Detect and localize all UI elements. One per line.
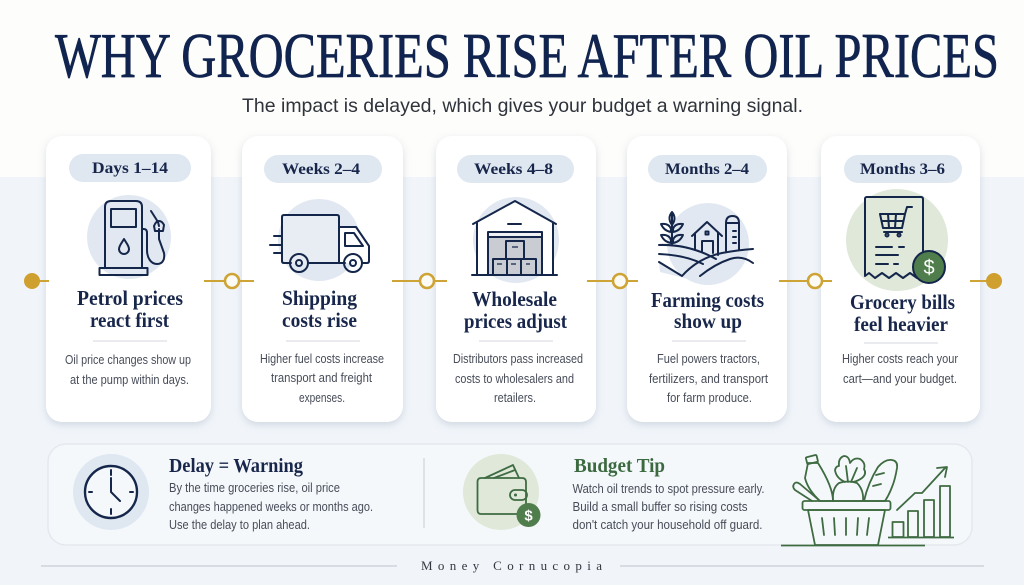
description: [649, 352, 768, 405]
heading: show up: [674, 309, 742, 333]
description: Fuel powers tractors,: [657, 352, 760, 366]
heading: [651, 288, 764, 333]
time pill: weeks 4-8: Weeks 4–8: [474, 161, 553, 178]
panel: step 3 wholesale: [436, 136, 596, 422]
heading: prices adjust: [464, 309, 567, 333]
heading: [850, 290, 955, 336]
panel: step 2 shipping: [242, 136, 403, 422]
description: Distributors pass increased: [453, 352, 583, 366]
heading: Farming costs: [651, 288, 764, 312]
heading: Grocery bills: [850, 290, 955, 314]
icon: wallet: $: [524, 508, 533, 524]
heading: Petrol prices: [77, 286, 183, 310]
timeline connector 3: [587, 274, 638, 288]
time pill: months 2-4: Months 2–4: [665, 161, 749, 178]
heading: [77, 286, 183, 332]
icon: clock: [73, 454, 149, 530]
time pill: months 3-6: Months 3–6: [860, 161, 945, 178]
heading: [464, 287, 567, 333]
icon: fuel pump: [87, 195, 171, 279]
heading: react first: [90, 308, 169, 332]
timeline connector: start dot: [24, 273, 49, 289]
text: delay = warning: Use the delay to plan ahead.: [169, 518, 310, 532]
description: cart—and your budget.: [843, 372, 957, 386]
icon: grocery basket with rising bar chart: [781, 455, 954, 546]
description: [65, 353, 191, 387]
icon: receipt with cart and dollar badge: $: [923, 257, 935, 279]
timeline connector: end dot: [970, 273, 1002, 289]
icon: warehouse: [472, 197, 559, 283]
text: delay = warning: By the time groceries rise, oil price: [169, 481, 340, 495]
description: Oil price changes show up: [65, 353, 191, 367]
heading: [282, 286, 357, 332]
description: for farm produce.: [667, 391, 752, 405]
timeline connector 2: [392, 274, 447, 288]
description: [453, 352, 583, 405]
description: fertilizers, and transport: [649, 372, 768, 386]
time pill: weeks 4-8: [457, 155, 574, 183]
text: delay = warning: [169, 455, 373, 532]
subtitle: The impact is delayed, which gives your budget a warning signal.: [242, 95, 803, 117]
time pill: months 2-4: [648, 155, 767, 183]
time pill: weeks 2-4: [264, 155, 382, 183]
text: budget tip: Budget Tip: [574, 455, 665, 477]
icon: wallet: [463, 454, 540, 530]
description: Higher fuel costs increase: [260, 352, 384, 366]
description: expenses.: [299, 391, 345, 405]
description: transport and freight: [271, 371, 372, 385]
heading: Wholesale: [472, 287, 557, 311]
panel: step 1 petrol: [46, 136, 211, 422]
description: at the pump within days.: [70, 373, 189, 387]
time pill: weeks 2-4: Weeks 2–4: [282, 161, 360, 178]
time pill: days 1-14: [69, 154, 191, 182]
timeline connector 1: [204, 274, 254, 288]
description: [842, 352, 958, 386]
text: budget tip: Build a small buffer so rising costs: [572, 500, 748, 514]
heading: Shipping: [282, 286, 357, 310]
panel: bottom tips: [48, 444, 972, 546]
text: delay = warning: changes happened weeks or months ago.: [169, 500, 373, 514]
text: budget tip: Watch oil trends to spot pressure early.: [572, 482, 764, 496]
description: costs to wholesalers and: [455, 372, 574, 386]
description: retailers.: [494, 391, 536, 405]
text: budget tip: [572, 455, 764, 532]
time pill: days 1-14: Days 1–14: [92, 160, 168, 177]
icon: receipt with cart and dollar badge: [846, 189, 948, 291]
panel: step 5 grocery bills: [821, 136, 980, 422]
footer brand: Money Cornucopia: [421, 558, 602, 573]
text: delay = warning: Delay = Warning: [169, 455, 303, 477]
timeline connector 4: [779, 274, 832, 288]
text: budget tip: don't catch your household off guard.: [572, 518, 762, 532]
icon: farm: [659, 203, 753, 285]
description: [260, 352, 384, 405]
heading: costs rise: [282, 308, 357, 332]
heading: feel heavier: [854, 312, 948, 336]
icon: truck: [270, 199, 369, 281]
time pill: months 3-6: [844, 155, 962, 183]
description: Higher costs reach your: [842, 352, 958, 366]
panel: step 4 farming: [627, 136, 787, 422]
